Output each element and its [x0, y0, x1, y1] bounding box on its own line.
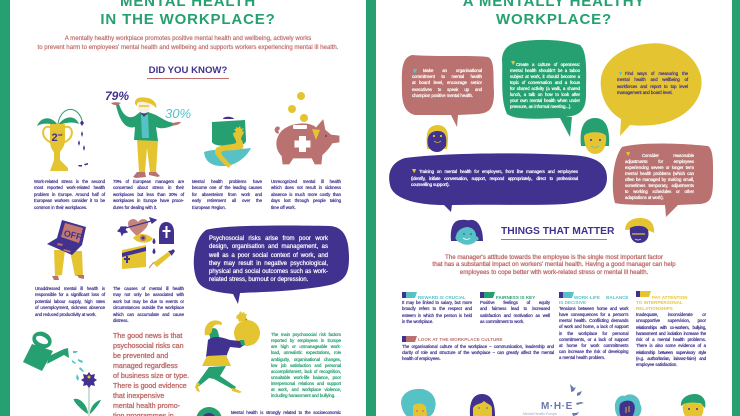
bubble text: measuring wellbeing: Find ways of measuring the: [625, 71, 688, 76]
text: absenteeism: [192, 178, 262, 210]
text: work-related stress: European workers consider it to be: [34, 198, 105, 203]
text: main psychosocial risk factors: ambiguity, organisational changes,: [271, 356, 341, 362]
head: green hair yellow face right: [681, 394, 705, 416]
text: work-life balance: Tensions between home and work: [559, 306, 628, 311]
text: unrecognized mental ill health: absence is much more costly than: [271, 192, 341, 196]
text: interpersonal relationships: Inadequate, inconsiderate or: [636, 312, 706, 317]
text: interpersonal relationships: relationships with co-workers, bullying,: [636, 324, 706, 330]
bubble text: measuring wellbeing: management and board level.: [617, 90, 673, 95]
heading: pay attention: TO INTERPERSONAL: [636, 300, 683, 305]
bubble text: measuring wellbeing: workforces and report to top level: [617, 84, 688, 89]
text: work-related stress: most reported work-related health: [34, 185, 105, 190]
heading: did you know: DID YOU KNOW?: [149, 65, 227, 76]
text: absenteeism: European Region.: [192, 204, 226, 210]
text: reward: [402, 300, 472, 324]
text: manager's attitude: The manager's attitude towards the employee is the single most important factor: [445, 254, 663, 260]
bubble text: culture of openness: your own mental health when under: [510, 98, 580, 103]
text: main psychosocial risk factors: interpersonal relations and support: [271, 381, 341, 386]
text: unaddressed mental ill health: of unemployment, sickness absence: [35, 305, 105, 310]
text: work-related stress: problem in Europe. Around half of: [34, 192, 105, 196]
bubble text: organisational commitment: executives to speak up and: [412, 87, 482, 92]
text: causes of mental ill health: circumstances outside the workplace: [113, 305, 184, 310]
intro text: [38, 35, 338, 51]
bubble text: organisational commitment: champion positive mental health.: [412, 93, 473, 98]
text: interpersonal relationships: There is also some evidence of a: [636, 343, 706, 348]
bubble text: measuring wellbeing: [616, 71, 688, 96]
text: the good news: managed regardless: [113, 362, 178, 370]
text: manager's attitude: [432, 254, 676, 276]
text: causes of mental ill health: may not only be associated with: [113, 292, 184, 297]
text: main psychosocial risk factors: low job satisfaction and personal: [271, 363, 341, 368]
text: unaddressed mental ill health: and reduced productivity at work.: [35, 312, 96, 317]
heading: reward is crucial: REWARD IS CRUCIAL: [418, 294, 466, 300]
icon: trophy with plant: nd: [58, 132, 63, 137]
text: fairness: and fairness lead to increased: [480, 306, 550, 311]
heading: fairness is key: FAIRNESS IS KEY: [496, 294, 535, 300]
heading: pay attention: [636, 294, 688, 311]
bubble text: culture of openness: subject at work, it should become a: [510, 74, 580, 79]
logo: Mental Health Europe: [523, 384, 584, 416]
head: teal hair purple face: [615, 394, 641, 416]
text: reward: esteem in which the person is held: [402, 312, 472, 318]
title: a mentally healthy workplace: WORKPLACE?: [496, 11, 612, 28]
bubble text: psychosocial risks: Psychosocial risks arise from poor work: [209, 236, 328, 242]
green border bars: [0, 0, 10, 416]
head: purple hair yellow face bottom: [470, 394, 495, 416]
bubble text: culture of openness: [510, 62, 580, 110]
text: reward: It may be linked to salary, but more: [402, 300, 472, 305]
bubble text: psychosocial risks: [208, 235, 328, 283]
speech bubble: rose adjustments: [613, 143, 713, 217]
text: main psychosocial risk factors: unsuitable work-life balance, poor: [271, 375, 341, 380]
bubble text: culture of openness: pressure, an informal meeting...).: [510, 104, 571, 109]
text: manager's attitude: that has a substantial impact on workers' mental health. Having a good manager can help: [432, 261, 676, 268]
text: absenteeism: become one of the leading causes: [192, 185, 262, 190]
bubble text: organisational commitment: [412, 68, 482, 98]
text: work-life balance: at home for work commitments: [559, 343, 628, 348]
text: the good news: of business size or type.: [113, 372, 189, 380]
text: fairness: [480, 300, 550, 324]
icon: briefcase with arm: [204, 117, 251, 168]
speech bubble: green culture: [502, 40, 586, 137]
text: causes of mental ill health: which can accumulate and cause: [113, 312, 184, 317]
text: main psychosocial risk factors: reported by employees in Europe: [271, 338, 341, 343]
text: causes of mental ill health: [112, 286, 184, 323]
bubble text: culture of openness: lunch, a talk on how to look after: [510, 92, 580, 97]
bubble text: culture of openness: Create a culture of openness:: [516, 62, 580, 67]
icon: laptop person: OFF: [63, 228, 83, 242]
text: fairness: as commitment to work.: [480, 319, 524, 324]
bubble text: organisational commitment: Make an organisational: [423, 68, 482, 73]
text: interpersonal relationships: unsupportive supervision, poor: [636, 318, 706, 323]
bubble text: culture of openness: mental health shouldn't be a taboo: [510, 68, 580, 73]
text: absenteeism: early retirement all over the: [192, 198, 262, 203]
bubble text: psychosocial risks: related stress, burnout or depression.: [209, 277, 308, 283]
text: main psychosocial risk factors: load, unrealistic expectations, role: [271, 350, 341, 355]
text: causes of mental ill health: distress.: [113, 318, 129, 323]
heading: work-life balance: WORK-LIFE BALANCE: [574, 294, 628, 300]
text: 79 percent of managers: [112, 178, 184, 210]
icon: causes cluster: [118, 218, 175, 269]
text: unaddressed mental ill health: Unaddressed mental ill health is: [35, 286, 105, 290]
title: a mentally healthy workplace: [463, 0, 645, 28]
icon: watering can: [23, 329, 84, 381]
text: interpersonal relationships: [636, 312, 706, 368]
text: workplace culture: clarity of role and structure of the workplace – can greatly affect the mental: [402, 350, 554, 355]
text: the good news: be prevented and: [113, 352, 168, 360]
title: mental health in the workplace: [100, 0, 276, 28]
bubble text: measuring wellbeing: mental health and wellbeing of: [617, 77, 688, 82]
bubble text: psychosocial risks: they may result in negative psychological,: [209, 261, 328, 267]
bubble text: psychosocial risks: design, organisation and management, as: [209, 244, 328, 250]
text: main psychosocial risk factors: at work, and workplace violence,: [271, 387, 341, 392]
text: unrecognized mental ill health: [270, 178, 341, 210]
intro text: A mentally healthy workplace promotes positive mental health and wellbeing, actively works: [65, 35, 311, 42]
text: unaddressed mental ill health: responsible for a significant loss of: [35, 292, 105, 297]
text: 79 percent of managers: 79% of European managers are: [113, 178, 184, 184]
icon: trophy with plant: [37, 109, 88, 171]
text: the good news: psychosocial risks can: [113, 342, 184, 350]
text: 79 percent of managers: workplaces but less than 30% of: [113, 192, 184, 196]
text: interpersonal relationships: employee satisfaction.: [636, 362, 677, 367]
icon: man with percentages: [105, 89, 191, 178]
bubble text: organisational commitment: at board level, encourage senior: [412, 80, 482, 85]
bubble text: reasonable adjustments: mental health problems (which can: [625, 171, 694, 176]
text: work-related stress: Work-related stress is the second: [34, 178, 105, 184]
text: unrecognized mental ill health: time off work.: [271, 204, 296, 210]
heading: work-life balance: [559, 294, 628, 305]
speech bubble: yellow measuring: [601, 43, 702, 136]
head: yellow hair purple face: [625, 218, 654, 243]
text: main psychosocial risk factors: The main psychosocial risk factors: [271, 332, 341, 337]
logo: Mental Health Europe: Mental Health Europe: [523, 412, 557, 416]
bubble text: culture of openness: topic of conversation and a focus: [510, 80, 580, 85]
head: purple hair teal face: [451, 220, 483, 245]
text: interpersonal relationships: (e.g. authoritarian, laissez-faire) and: [636, 356, 706, 361]
icon: man with percentages: 79%: [105, 89, 129, 103]
icon: laptop person: [47, 220, 86, 280]
text: main psychosocial risk factors: are high or unmanageable work-: [271, 344, 341, 349]
text: manager's attitude: employees to cope better with work-related stress or mental ill health.: [460, 269, 648, 276]
bubble text: training: counselling support).: [411, 182, 450, 187]
head: green hair yellow face: [581, 118, 609, 154]
text: socioeconomic: Mental health is strongly related to the socioeconomic: [231, 410, 341, 415]
text: 79 percent of managers: workplaces in Europe have proce-: [113, 198, 184, 203]
text: the good news: The good news is that: [113, 332, 182, 340]
text: interpersonal relationships: harassment and isolation increase the: [636, 331, 706, 336]
text: work-life balance: in the workplace for personal: [559, 330, 628, 336]
text: reward: in the workplace.: [402, 319, 433, 324]
bubble text: reasonable adjustments: Consider reasonable: [642, 153, 694, 158]
bubble text: reasonable adjustments: [624, 153, 694, 200]
text: workplace culture: health of employees.: [402, 356, 441, 361]
text: 79 percent of managers: dures for dealing with it.: [113, 204, 157, 210]
text: main psychosocial risk factors: including harassment and bullying.: [271, 393, 335, 398]
bubble text: psychosocial risks: physical and social outcomes such as work-: [209, 269, 328, 275]
text: workplace culture: [402, 344, 554, 362]
title: mental health in the workplace: IN THE WORKPLACE?: [100, 11, 276, 28]
text: unaddressed mental ill health: [35, 286, 106, 318]
text: work-life balance: of work and home, a lack of support: [559, 324, 628, 329]
text: absenteeism: for absenteism from work and: [192, 192, 262, 196]
bubble text: reasonable adjustments: adjustments for employees: [625, 159, 694, 164]
icon: green circle badge: [196, 407, 222, 416]
text: the good news: There is good evidence: [113, 382, 187, 390]
icon: piggy bank with coins: [275, 92, 339, 164]
text: the good news: that inexpensive: [113, 392, 164, 400]
text: unrecognized mental ill health: days lost through people taking: [271, 198, 341, 203]
logo: Mental Health Europe: M·H·E: [541, 401, 573, 412]
icon: trophy with plant: 2: [51, 132, 58, 144]
heading: pay attention: PAY ATTENTION: [652, 294, 688, 300]
bubble text: culture of openness: for shared activity (a walk, a shared: [510, 86, 580, 91]
text: unrecognized mental ill health: which does not result in sickness: [271, 185, 341, 190]
intro text: to prevent harm to employees' mental health and wellbeing and supports workers experiencing mental ill health.: [38, 44, 338, 51]
head: yellow face purple hair top: [427, 125, 448, 152]
text: unaddressed mental ill health: potential labour supply, high rates: [35, 299, 105, 304]
bubble text: training: [411, 169, 578, 188]
text: fairness: Positive feelings of equity: [480, 300, 550, 305]
bubble text: organisational commitment: commitment to mental health: [412, 74, 482, 79]
text: unrecognized mental ill health: Unrecognized mental ill health: [271, 178, 341, 184]
text: work-life balance: commitments, or a lack of support: [559, 337, 628, 342]
text: work-life balance: can increase the risk of developing: [559, 349, 628, 354]
bubble text: reasonable adjustments: experiencing severe or longer term: [625, 165, 694, 170]
text: work-life balance: mental health. Conflicting demands: [559, 318, 628, 323]
text: interpersonal relationships: risk of a mental health problems.: [636, 337, 706, 342]
text: fairness: satisfaction and motivation as well: [480, 312, 550, 318]
bubble text: training: Training on mental health for employers, front line managers and employees: [419, 169, 578, 174]
text: causes of mental ill health: The causes of mental ill health: [113, 286, 184, 290]
head: teal afro: [401, 389, 436, 416]
bubble text: reasonable adjustments: adaptations at work).: [625, 195, 664, 200]
speech bubble: purple training: [389, 153, 607, 212]
text: work-related stress: common in their workplaces.: [34, 204, 87, 210]
bubble text: psychosocial risks: well as a poor social context of work, and: [209, 253, 328, 259]
bubble text: training: (identify, initiate conversation, support, respond appropriately., direct to professional: [411, 176, 578, 180]
speech bubble: psychosocial risks: [194, 225, 349, 304]
text: the good news: mental health promo-: [113, 402, 180, 410]
text: work-related stress: [34, 178, 106, 210]
bubble text: reasonable adjustments: sometimes temporary, adjustments: [625, 183, 694, 188]
text: main psychosocial risk factors: [271, 332, 342, 398]
speech bubble: rose commitment: [402, 55, 494, 127]
heading: look at the workplace culture: LOOK AT THE WORKPLACE CULTURE: [418, 337, 503, 342]
text: the good news: [112, 332, 189, 416]
heading: things that matter: THINGS THAT MATTER: [501, 226, 614, 237]
text: work-life balance: a mental health problem.: [559, 355, 605, 360]
icon: man with percentages: 30%: [165, 106, 191, 121]
text: absenteeism: Mental health problems have: [192, 178, 262, 184]
text: work-life balance: have consequences for a person's: [559, 312, 628, 317]
bubble text: reasonable adjustments: often be managed by making small,: [625, 177, 694, 182]
text: main psychosocial risk factors: accomplishment, lack of recognition,: [271, 369, 341, 374]
icon: flower: [74, 372, 101, 416]
icons: bubble bullets: [412, 61, 630, 173]
icons: pointing hand tabs: [402, 291, 651, 342]
icon: woman carrying bomb: [195, 311, 260, 393]
text: reward: broadly refers to the respect and: [402, 306, 472, 311]
text: work-life balance: [559, 306, 629, 360]
heading: work-life balance: IS DECISIVE: [559, 300, 586, 305]
heading: pay attention: RELATIONSHIPS: [636, 306, 673, 311]
text: 79 percent of managers: concerned about stress in their: [113, 185, 184, 190]
bubble text: reasonable adjustments: to working schedules or other: [625, 189, 694, 194]
text: workplace culture: The organisational culture of the workplace – communication, leadership and: [402, 344, 554, 349]
text: interpersonal relationships: relationship between supervisory style: [636, 350, 706, 354]
text: causes of mental ill health: work but may be due to events or: [113, 299, 184, 304]
